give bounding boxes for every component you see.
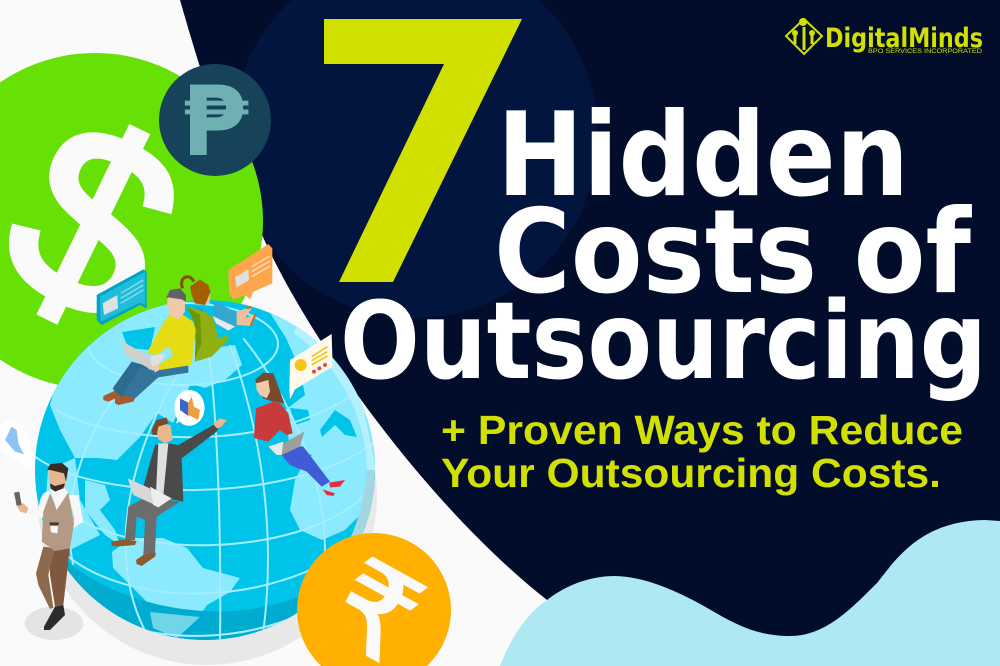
landmasses — [45, 302, 376, 638]
lighter navy circle behind the 7 — [232, 0, 598, 318]
title — [340, 88, 987, 404]
oceans over land — [33, 327, 357, 458]
person: man in grey suit — [111, 390, 227, 566]
big number 7 — [324, 19, 522, 282]
people at the top of the globe — [97, 244, 272, 405]
green circle — [0, 53, 263, 389]
card: blue profile bubble — [97, 269, 147, 325]
atmospheric rim — [293, 327, 375, 470]
logo — [786, 18, 983, 55]
speech bubble: rating — [289, 334, 333, 399]
title: Hidden — [497, 88, 909, 223]
speech bubble: thumbs up — [175, 390, 205, 426]
subtitle: + Proven Ways to Reduce — [441, 407, 963, 453]
person: yellow hoodie man — [103, 288, 196, 405]
logo icon — [786, 18, 822, 54]
light blue wave — [500, 520, 1000, 666]
peso coin: ₱ — [182, 66, 249, 178]
peso coin — [159, 64, 271, 178]
grid lines — [35, 303, 373, 640]
logo: BPO SERVICES INCORPORATED — [868, 49, 983, 55]
card: orange profile bubble — [228, 244, 272, 299]
person: woman in red top — [254, 334, 345, 496]
globe — [33, 300, 377, 642]
globe ground shadow — [37, 325, 377, 665]
speech bubble: map — [0, 419, 32, 470]
subtitle — [441, 407, 963, 496]
bottom shaded band — [67, 562, 298, 640]
subtitle: Your Outsourcing Costs. — [441, 450, 941, 496]
person: man with vest and phone — [0, 419, 83, 640]
person: green jacket woman — [182, 277, 256, 362]
